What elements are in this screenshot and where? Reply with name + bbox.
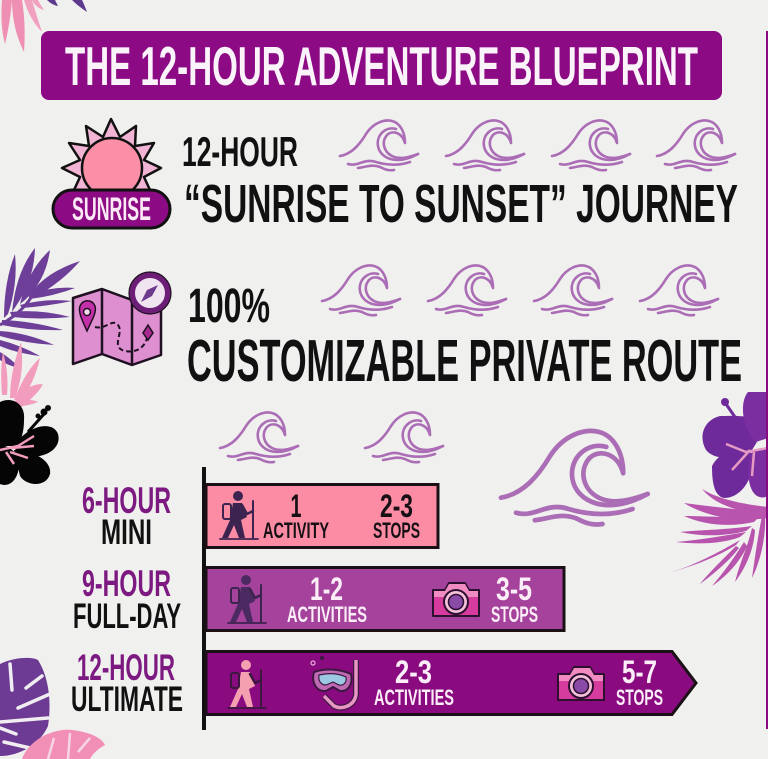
label: 6-hour mini: MINI	[101, 513, 152, 552]
bar: 9-hour full-day: 3-5	[496, 571, 532, 607]
label: 9-hour full-day: FULL-DAY	[73, 597, 181, 636]
label: 6-hour mini: 6-HOUR	[82, 480, 171, 521]
label: 12-hour ultimate: ULTIMATE	[71, 680, 183, 719]
heading: sunrise to sunset: 12-HOUR	[182, 128, 298, 175]
foliage: black hibiscus	[0, 400, 59, 485]
bar: 6-hour mini: 2-3	[380, 488, 413, 524]
bar: 9-hour full-day: ACTIVITIES	[287, 602, 367, 627]
chart: tier duration bars	[202, 467, 696, 730]
bar: 12-hour ultimate arrow: 5-7	[622, 654, 657, 690]
bar: 9-hour full-day: STOPS	[491, 602, 538, 627]
label: 12-hour ultimate: 12-HOUR	[77, 647, 175, 688]
heading: customizable route	[187, 280, 742, 394]
icon: snorkel mask	[311, 656, 356, 708]
bar: 9-hour full-day	[206, 568, 564, 630]
icons: wave row one	[340, 121, 735, 170]
icon: sunrise badge	[53, 119, 170, 228]
bar: 12-hour ultimate arrow	[206, 652, 696, 714]
icon: large wave	[501, 431, 648, 525]
label: 9-hour full-day: 9-HOUR	[82, 563, 171, 604]
label: 9-hour full-day	[73, 563, 181, 636]
foliage: pink monstera	[22, 730, 105, 759]
bar: 6-hour mini: 1	[290, 488, 302, 524]
chart axis	[202, 467, 206, 730]
bar: 6-hour mini: ACTIVITY	[263, 518, 329, 543]
foliage: right purple hibiscus	[702, 392, 768, 498]
heading: customizable route: 100%	[188, 280, 270, 333]
foliage: left pink palm	[1, 342, 43, 412]
bar: 6-hour mini	[206, 484, 438, 548]
foliage: top-left pink palm and purple tips	[1, 0, 87, 52]
bar: 6-hour mini: STOPS	[373, 518, 420, 543]
bar: 12-hour ultimate arrow: ACTIVITIES	[374, 685, 454, 710]
label: 6-hour mini	[82, 480, 171, 552]
heading: sunrise to sunset	[182, 128, 738, 234]
label: 12-hour ultimate	[71, 647, 183, 719]
bar: 12-hour ultimate arrow: 2-3	[395, 654, 432, 690]
bar: 9-hour full-day: 1-2	[310, 571, 343, 607]
foliage: left purple palm	[0, 248, 80, 368]
icons: wave row two	[322, 266, 718, 315]
foliage: purple monstera	[0, 658, 50, 756]
foliage: right magenta palm	[672, 489, 768, 586]
bar: 12-hour ultimate arrow: STOPS	[616, 685, 663, 710]
icon: sunrise badge: SUNRISE	[72, 191, 151, 227]
icon: folded map with compass	[73, 272, 171, 365]
right edge rule	[766, 31, 768, 729]
icons: wave row three	[220, 413, 443, 462]
